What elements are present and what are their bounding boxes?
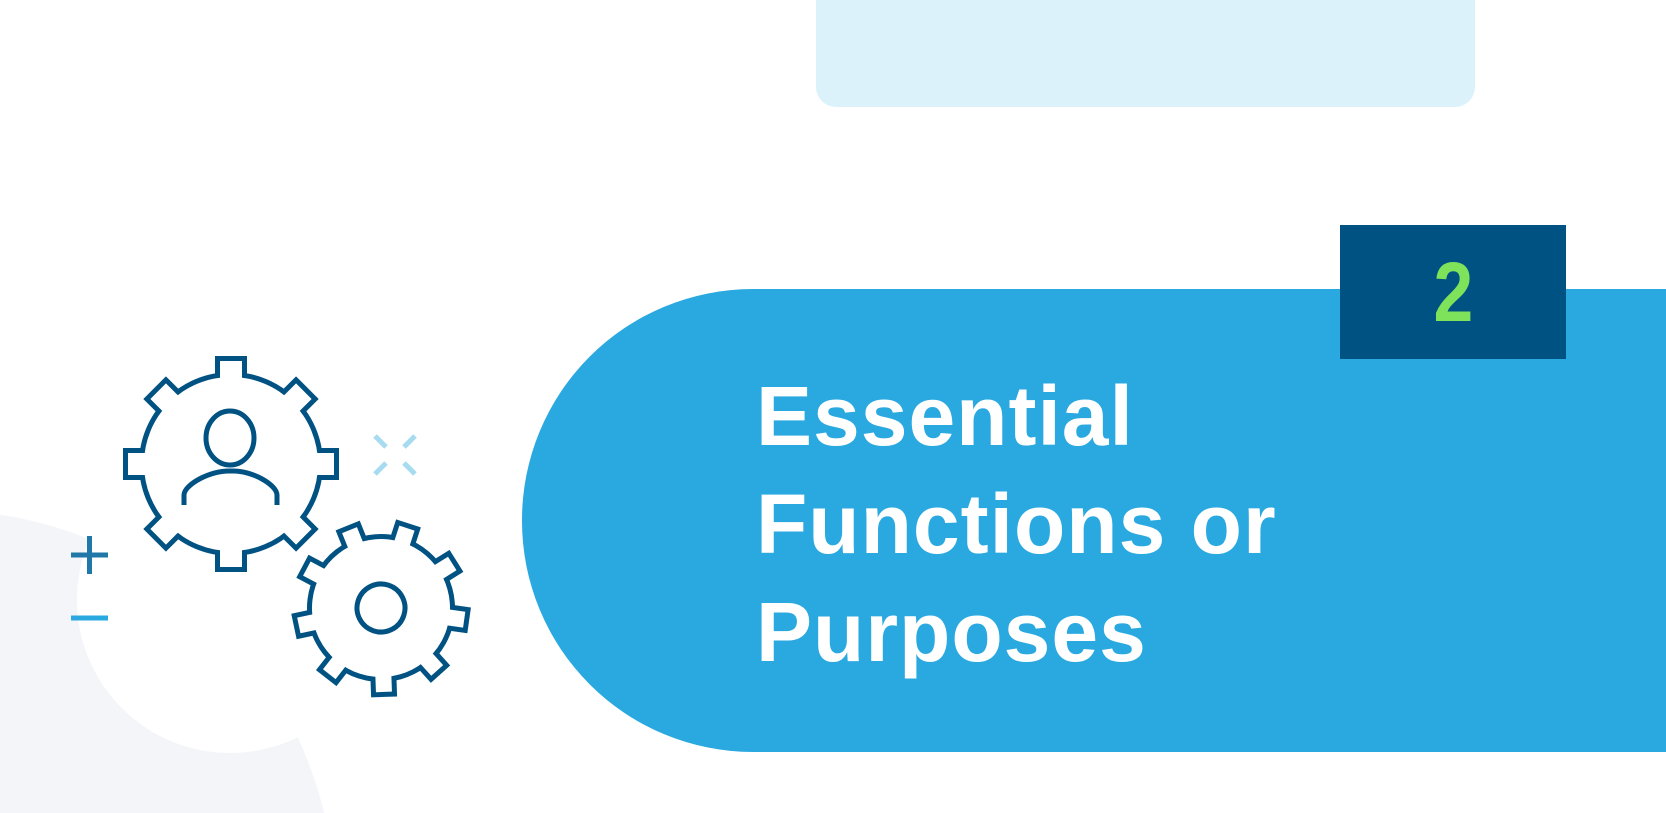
heading text: Functions or	[756, 477, 1277, 571]
icon: sparkle	[375, 436, 415, 474]
icon: plus	[71, 536, 108, 574]
icon: small gear	[268, 496, 494, 720]
icon: large gear	[123, 356, 339, 572]
icon: minus	[71, 616, 108, 620]
heading text	[756, 369, 1277, 679]
icon: gears with person	[71, 356, 471, 698]
number badge	[1340, 225, 1566, 359]
background: gray blob	[0, 515, 324, 813]
main blue pill banner	[522, 289, 1666, 752]
heading text: Purposes	[756, 585, 1147, 679]
icon: person	[184, 411, 277, 505]
top light blue panel	[816, 0, 1475, 107]
number badge: 2	[1433, 245, 1473, 339]
heading text: Essential	[756, 369, 1134, 463]
